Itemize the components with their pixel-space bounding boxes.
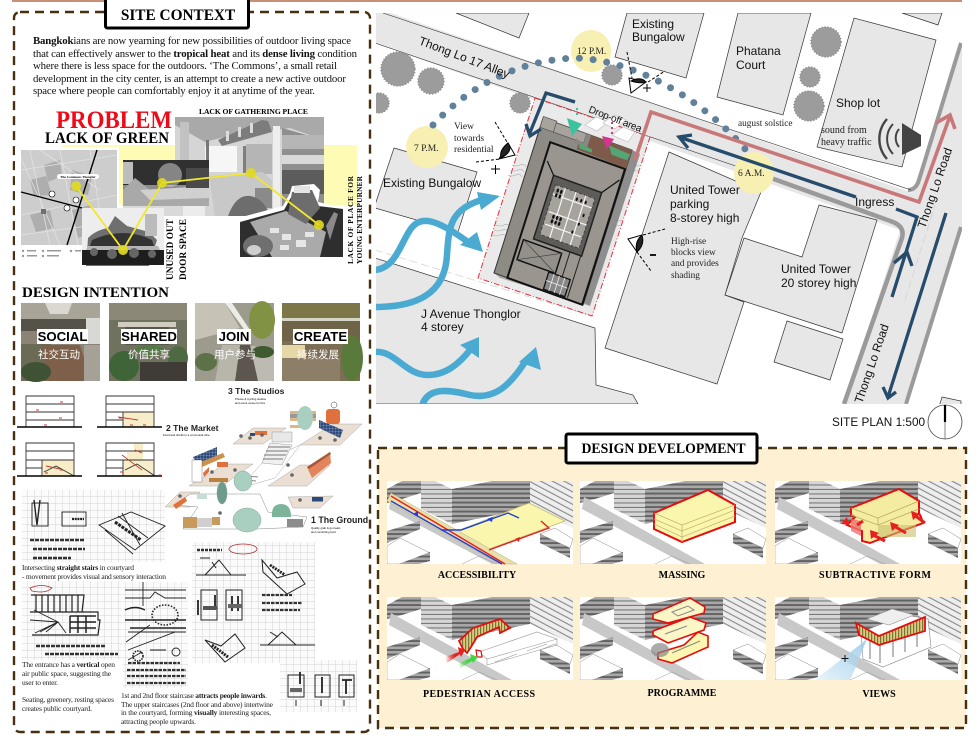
panel: design development xyxy=(378,434,966,728)
label: views: VIEWS xyxy=(862,689,896,700)
panel: site plan: residential xyxy=(454,145,494,155)
heading: design intention: DESIGN INTENTION xyxy=(22,285,169,301)
plan labels: Drop-off area xyxy=(587,105,644,135)
sun path xyxy=(433,58,750,155)
photo: building xyxy=(82,208,164,266)
card: join xyxy=(195,301,275,381)
text block: intro xyxy=(33,35,358,97)
caption: staircase: The upper staircases (2nd floor and above) intertwine xyxy=(121,700,274,709)
plan labels: Court xyxy=(736,58,766,72)
diagram: programme xyxy=(580,597,766,680)
heading: design development: DESIGN DEVELOPMENT xyxy=(582,441,746,457)
plan labels: Thong Lo 17 Alley xyxy=(417,34,512,81)
plan labels: Phatana xyxy=(736,44,781,58)
caption: vertical entrance: creates public courtyard. xyxy=(22,704,92,713)
card: shared: 价值共享 xyxy=(128,348,170,361)
panel: site plan: High-rise xyxy=(671,237,706,247)
road edges xyxy=(771,43,961,404)
plan labels: J Avenue Thonglor xyxy=(421,307,521,321)
section 1 xyxy=(17,396,82,427)
photo: city map xyxy=(15,147,119,264)
caption: staircase: 1st and 2nd floor staircase attracts people inwards. xyxy=(121,691,267,700)
sketch: stair plans lower xyxy=(280,660,357,712)
photo: market stall xyxy=(238,184,345,258)
label: accessibility: ACCESSIBILITY xyxy=(438,570,517,581)
card: social xyxy=(21,303,100,382)
roads xyxy=(375,10,963,404)
label: unused outdoor space: UNUSED OUT xyxy=(166,218,176,280)
side ripple marks xyxy=(492,164,642,237)
plan labels: Thong Lo Road xyxy=(852,322,892,405)
panel: site plan: august solstice xyxy=(738,119,792,129)
panel: site plan: 6 A.M. xyxy=(738,169,765,179)
label: the ground: 1 The Ground xyxy=(311,515,368,525)
plan labels: United Tower xyxy=(781,262,851,276)
sketch: vertical entrance xyxy=(22,581,122,660)
section 2 xyxy=(97,396,162,427)
card: social: SOCIAL xyxy=(38,329,87,344)
text block: intro: where there is less space for the outdoors. ‘The Commons’, a small retail xyxy=(33,60,337,72)
section 3 xyxy=(17,443,82,476)
plan labels: Thong Lo Road xyxy=(915,146,955,230)
caption: staircase: attracting people upwards. xyxy=(121,717,196,726)
diagram: section studies xyxy=(17,396,162,477)
plan labels: Ingress xyxy=(855,195,894,209)
label: programme: PROGRAMME xyxy=(648,688,717,699)
heading: problem: PROBLEM xyxy=(56,107,172,134)
heading: design development xyxy=(566,434,757,463)
card: join: JOIN xyxy=(219,329,249,344)
sketch: stair plan studies xyxy=(192,542,315,663)
heading: site context xyxy=(106,0,248,28)
panel: site plan: and provides xyxy=(671,259,719,269)
plan labels: parking xyxy=(670,197,709,211)
plan labels: Bungalow xyxy=(632,30,685,44)
label: the market: 2 The Market xyxy=(166,423,219,433)
label: the market: Food and drinks in a communal vibe xyxy=(163,433,210,437)
icon: view eye positive left xyxy=(476,122,515,174)
caption: staircase xyxy=(121,691,274,726)
caption: staircase: in the courtyard, forming visually interesting spaces, xyxy=(121,708,271,717)
photo: city map: The Commons Thonglor xyxy=(60,175,96,179)
diagram: views xyxy=(775,597,961,680)
problem connector line xyxy=(71,168,324,255)
icon: speaker xyxy=(879,119,921,159)
trees xyxy=(369,27,841,121)
drop-off hatch xyxy=(585,115,635,142)
card: create: 持续发展 xyxy=(297,348,339,361)
label: site plan scale: SITE PLAN 1:500 xyxy=(832,415,926,429)
caption: intersecting stairs: - movement provides visual and sensory interaction xyxy=(22,572,166,581)
caption: vertical entrance: The entrance has a vertical open xyxy=(22,660,115,669)
caption: vertical entrance: air public space, suggesting the xyxy=(22,669,112,678)
problem yellow backdrop xyxy=(62,145,357,205)
sketch: staircase courtyard xyxy=(123,582,188,688)
card: create: CREATE xyxy=(294,329,347,344)
diagram: accessibility xyxy=(387,481,573,564)
diagram: isometric programme xyxy=(163,386,368,534)
plan labels: 4 storey xyxy=(421,320,464,334)
sun yellow circles xyxy=(406,30,774,194)
photo: courtyard xyxy=(123,160,209,216)
card: shared: SHARED xyxy=(121,329,177,344)
text block: intro: Bangkokians are now yearning for new possibilities of outdoor living space xyxy=(33,35,351,47)
label: the ground: and comforting food xyxy=(311,530,336,534)
panel: site plan: 12 P.M. xyxy=(577,47,606,57)
panel: site plan xyxy=(369,10,963,410)
label: subtractive form: SUBTRACTIVE FORM xyxy=(819,570,932,581)
label: the market xyxy=(163,423,219,437)
panel: site plan: towards xyxy=(454,134,484,144)
caption: vertical entrance: Seating, greenery, resting spaces xyxy=(22,695,114,704)
plan labels xyxy=(383,17,955,405)
icon: view eye positive top xyxy=(627,52,665,93)
label: the studios: and event venue for hire xyxy=(235,401,266,405)
label: the studios xyxy=(228,386,285,405)
text block: intro: development in the city center, is an attempt to create a new active outdoor xyxy=(33,73,346,85)
label: the ground: Quality grab & go treats xyxy=(311,526,341,530)
route: egress red xyxy=(635,112,955,202)
studio objects xyxy=(173,402,343,509)
caption: vertical entrance: user to enter. xyxy=(22,678,58,687)
label: pedestrian access: PEDESTRIAN ACCESS xyxy=(423,689,535,700)
diagram: pedestrian access xyxy=(387,597,573,680)
sketch: intersecting stairs xyxy=(22,490,165,562)
label: unused outdoor space xyxy=(166,218,189,280)
icon: north arrow xyxy=(928,405,962,439)
card: create xyxy=(282,303,363,381)
section 4 xyxy=(97,443,162,477)
card: social: 社交互动 xyxy=(38,348,80,361)
green trees and figures xyxy=(217,471,261,532)
panel: site plan: 7 P.M. xyxy=(414,144,439,154)
plan labels: Existing xyxy=(632,17,674,31)
teal and magenta drop-off markers xyxy=(567,108,614,149)
text block: intro: that can effectively answer to the tropical heat and its dense living condition xyxy=(33,48,358,60)
label: young enterprener: YOUNG ENTERPURNER xyxy=(355,175,364,264)
text block: intro: space where people can comfortably enjoy it at anytime of the year. xyxy=(33,85,315,97)
plan labels: Existing Bungalow xyxy=(383,176,481,190)
plan labels: 20 storey high xyxy=(781,276,856,290)
panel: site context xyxy=(14,0,370,732)
plan labels: Shop lot xyxy=(836,96,881,110)
label: the ground xyxy=(311,515,368,534)
label: unused outdoor space: DOOR SPACE xyxy=(179,219,189,280)
panel: site plan: View xyxy=(454,122,474,132)
plan labels: 8-storey high xyxy=(670,211,739,225)
heading: site context: SITE CONTEXT xyxy=(121,7,235,24)
card: join: 用户参与 xyxy=(214,348,256,361)
caption: vertical entrance xyxy=(22,660,115,713)
label: the studios: 3 The Studios xyxy=(228,386,285,396)
site boundary xyxy=(478,98,650,316)
label: young enterprener: LACK OF PLACE FOR xyxy=(346,175,355,264)
panel: site plan: shading xyxy=(671,271,700,281)
icon: view eye negative xyxy=(628,229,665,271)
label: gathering place: LACK OF GATHERING PLACE xyxy=(199,107,308,116)
diagram: massing xyxy=(580,481,766,564)
caption: intersecting stairs: Intersecting straight stairs in courtyard xyxy=(22,563,134,572)
building plan xyxy=(494,116,640,306)
label: massing: MASSING xyxy=(659,570,706,581)
photo: gathering place xyxy=(175,117,324,216)
heading: lack of green: LACK OF GREEN xyxy=(45,130,169,147)
label: young enterprener xyxy=(346,175,364,264)
panel: site plan: heavy traffic xyxy=(821,137,872,148)
buildings xyxy=(375,13,961,410)
label: the studios: Photos & Cycling studios xyxy=(235,397,267,401)
panel: site plan: sound from xyxy=(821,125,867,136)
card: shared xyxy=(109,303,188,381)
diagram: subtractive form xyxy=(775,481,961,564)
caption: intersecting stairs xyxy=(22,563,166,581)
plan labels: United Tower xyxy=(670,183,740,197)
route: ingress navy xyxy=(526,93,946,398)
panel: site plan: blocks view xyxy=(671,248,716,258)
wind arrows xyxy=(375,198,525,410)
